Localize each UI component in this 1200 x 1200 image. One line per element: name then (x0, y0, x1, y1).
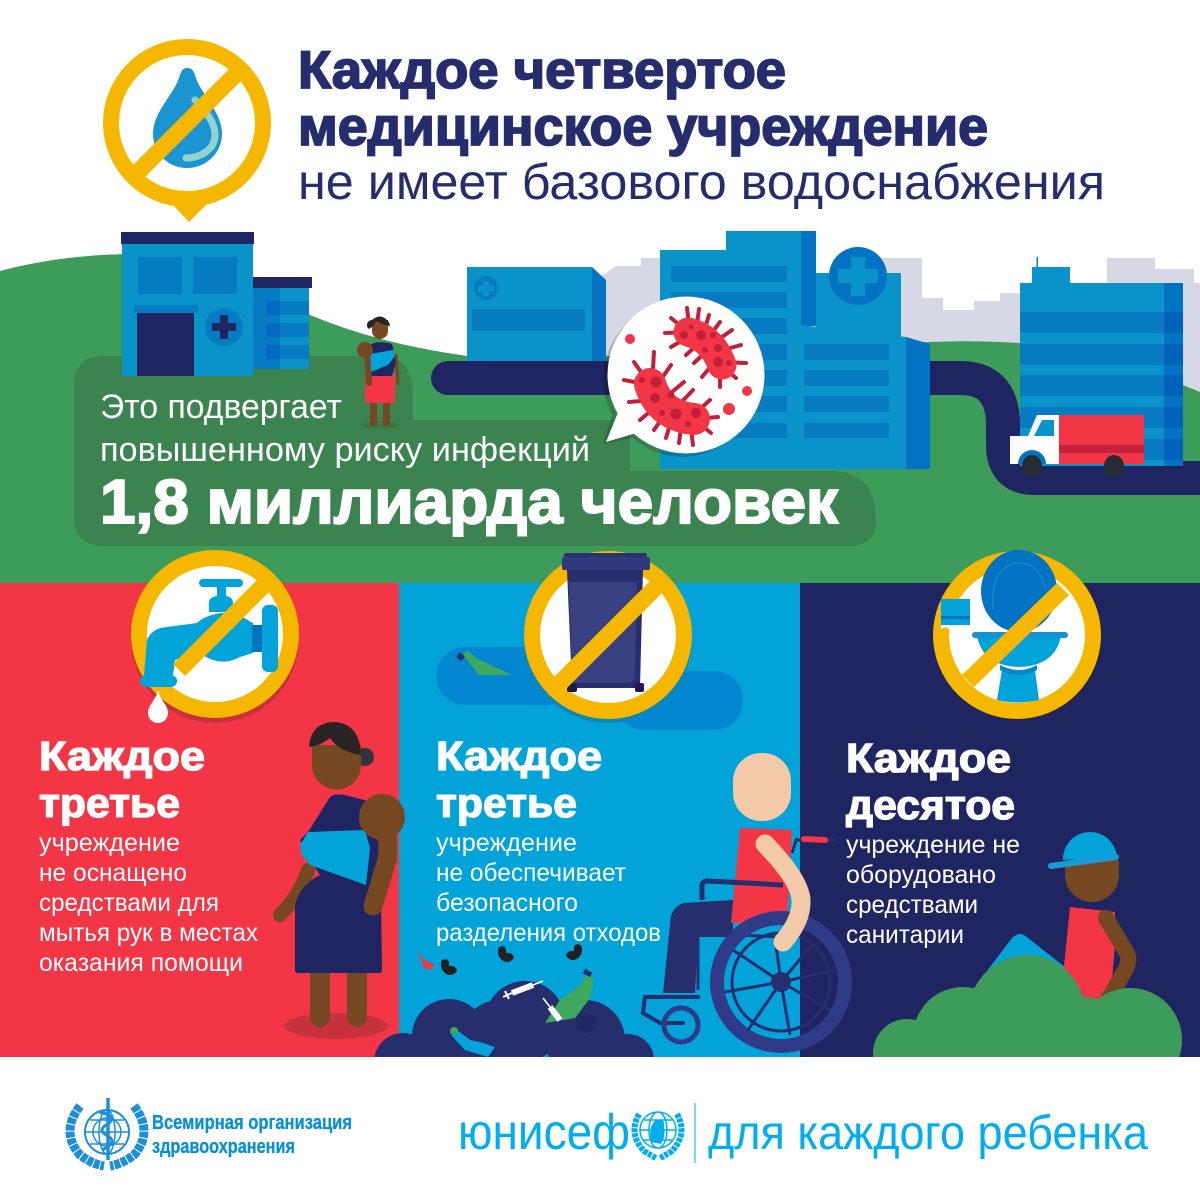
logo: WHO: здравоохранения (152, 1136, 295, 1158)
logo: UNICEF (458, 1103, 1148, 1163)
speech bubble with bacteria (603, 296, 764, 457)
green hill (0, 254, 1200, 583)
text: sanitation: средствами (846, 891, 978, 919)
title (298, 41, 1105, 210)
bottle: green (545, 973, 594, 1023)
text: waste: Каждое (436, 733, 602, 779)
icon: no faucet (131, 555, 299, 723)
text: waste (436, 733, 661, 947)
woman with baby (280, 722, 405, 1039)
waste pile (374, 944, 654, 1091)
risk text: 1,8 миллиарда человек (100, 468, 839, 537)
logo: WHO (70, 1098, 352, 1166)
text: handwashing: оказания помощи (39, 949, 243, 977)
title: Каждое четвертое (298, 41, 786, 100)
bacterium: upper (665, 308, 746, 387)
building: right tower (1020, 257, 1183, 466)
title: не имеет базового водоснабжения (298, 154, 1105, 210)
WHO emblem (70, 1098, 144, 1166)
road (448, 378, 1200, 478)
syringe: lower (543, 998, 560, 1020)
bottle: blue (452, 1027, 495, 1057)
logo: UNICEF: юнисеф (458, 1104, 630, 1160)
man behind bush (965, 832, 1128, 1010)
title: медицинское учреждение (298, 97, 988, 157)
text: sanitation (846, 735, 1020, 949)
risk text (100, 388, 839, 537)
icon: no waste bin (524, 553, 692, 723)
text: sanitation: санитарии (846, 921, 964, 949)
text: handwashing: Каждое (39, 733, 205, 779)
text: handwashing: не оснащено (39, 859, 187, 887)
truck (1010, 415, 1144, 477)
panel: handwashing (red) (0, 583, 399, 1057)
text: handwashing (39, 733, 258, 977)
clinic building (121, 232, 312, 376)
risk text: Это подвергает (100, 388, 342, 426)
text: handwashing: учреждение (39, 829, 180, 857)
beans (441, 944, 582, 975)
bush (873, 955, 1182, 1092)
panel: waste (blue) (399, 583, 800, 1057)
woman with baby, small (357, 316, 400, 429)
text: sanitation: учреждение не (846, 831, 1020, 859)
bacterium: lower (624, 352, 718, 445)
text: waste: третье (436, 780, 577, 826)
panel: risk text background (74, 356, 876, 546)
text: handwashing: средствами для (39, 889, 219, 917)
logo: UNICEF: для каждого ребенка (708, 1107, 1148, 1160)
text: handwashing: третье (39, 780, 180, 826)
risk text: повышенному риску инфекций (100, 431, 590, 469)
text: waste: разделения отходов (436, 919, 661, 947)
text: sanitation: оборудовано (846, 861, 996, 889)
blue blobs (436, 647, 743, 730)
panel: sanitation (navy) (800, 583, 1200, 1057)
text: waste: учреждение (436, 829, 577, 857)
icon: floating bottle (456, 650, 512, 675)
building: small hospital (467, 267, 606, 361)
text: waste: не обеспечивает (436, 859, 627, 887)
icon: no toilet (941, 550, 1093, 711)
building: large hospital (660, 231, 930, 469)
UNICEF emblem (635, 1112, 681, 1158)
text: sanitation: десятое (846, 782, 1015, 828)
wheelchair user (643, 753, 845, 1046)
logo: WHO: Всемирная организация (152, 1112, 352, 1134)
text: handwashing: мытья рук в местах (39, 919, 258, 947)
text: waste: безопасного (436, 889, 578, 917)
icon: no water drop (111, 47, 263, 222)
footer background (0, 1057, 1200, 1200)
syringe: upper (503, 981, 543, 999)
text: sanitation: Каждое (846, 735, 1011, 781)
city skyline (596, 258, 1200, 400)
